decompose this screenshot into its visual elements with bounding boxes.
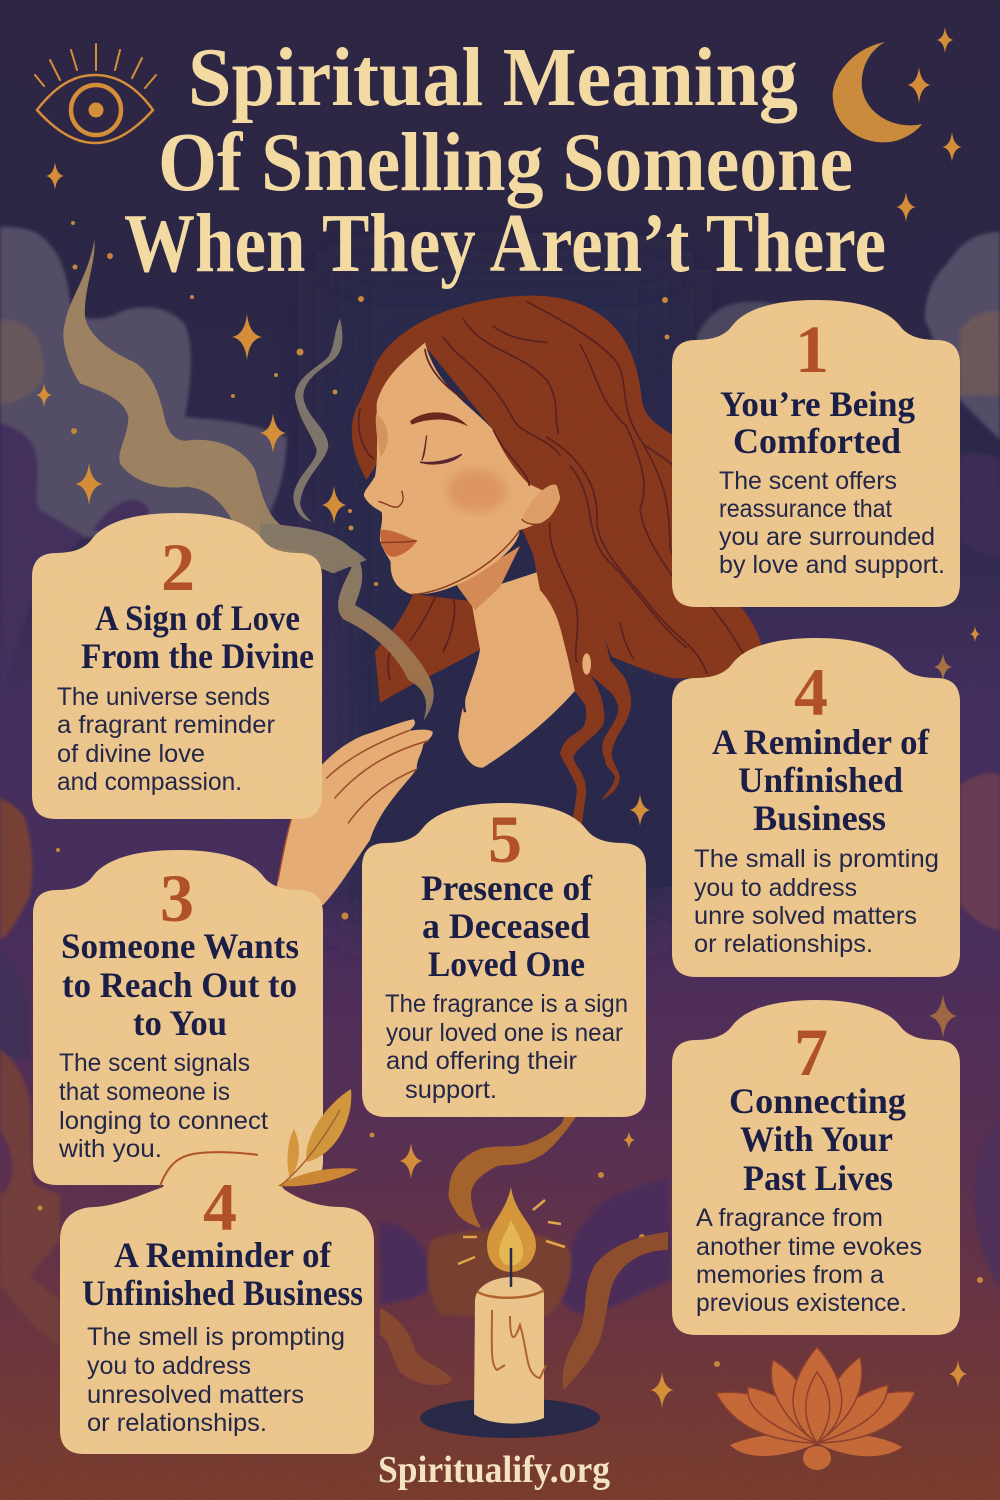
card 4 right: Unfinished (738, 760, 903, 800)
card 4 right (672, 638, 960, 977)
card 7: memories from a (696, 1261, 884, 1289)
card 5: support. (405, 1076, 497, 1104)
hair behind neck (375, 594, 480, 703)
card 2 (32, 513, 322, 819)
card 3: that someone is (59, 1078, 230, 1106)
card 3: The scent signals (59, 1049, 250, 1077)
card 2: The universe sends (57, 683, 270, 711)
dust specks (38, 221, 983, 1367)
smoke wisp: large left (63, 240, 367, 573)
hair (352, 296, 765, 826)
card 4 right: unre solved matters (694, 902, 917, 930)
lips (380, 530, 417, 557)
card 1: you are surrounded (719, 523, 935, 551)
card 4 bottom: you to address (87, 1352, 251, 1380)
smoke wisp: near nose and hand (260, 523, 434, 721)
card 3: Someone Wants (61, 926, 299, 966)
card 5: The fragrance is a sign (385, 990, 628, 1018)
card 5: Loved One (428, 944, 585, 984)
icon: leaf sprig (160, 1089, 358, 1186)
card 2: A Sign of Love (95, 598, 300, 638)
card 3: longing to connect (59, 1107, 268, 1135)
card 2: and compassion. (57, 768, 242, 796)
navy glow behind the woman (335, 270, 675, 920)
face (364, 342, 560, 594)
card 7 (672, 1000, 960, 1335)
card 7: another time evokes (696, 1233, 922, 1261)
card 5: a Deceased (422, 906, 590, 946)
card 5: your loved one is near (386, 1019, 623, 1047)
card 5 (362, 801, 646, 1117)
card 2: of divine love (57, 740, 205, 768)
card 3: with you. (58, 1135, 162, 1163)
card 4 right: A Reminder of (712, 722, 930, 762)
title (124, 31, 886, 290)
card 4 bottom: A Reminder of (114, 1235, 332, 1275)
smoke wisp: thin (293, 318, 342, 522)
collar shadow (464, 671, 473, 712)
card 7: previous existence. (696, 1289, 907, 1317)
candle plate (420, 1398, 600, 1438)
card 1: 1 (795, 311, 829, 387)
finger lines (278, 731, 428, 880)
icon: crescent moon (833, 42, 922, 142)
card 1: You’re Being (720, 384, 915, 424)
closed eye (420, 435, 462, 464)
hair strands (359, 301, 747, 680)
card 4 bottom (60, 1155, 374, 1454)
candle smoke (380, 1100, 668, 1390)
nose (378, 491, 403, 507)
icon: lotus (716, 1347, 915, 1470)
card 3: to You (133, 1003, 227, 1043)
card 1: Comforted (733, 421, 901, 461)
eyebrow (410, 412, 468, 426)
title: Of Smelling Someone (158, 116, 853, 209)
card 3 (33, 850, 323, 1185)
card 5: 5 (488, 801, 522, 877)
title: When They Aren’t There (124, 197, 886, 290)
card 7: A fragrance from (696, 1204, 883, 1232)
card 1: reassurance that (719, 495, 892, 523)
ear (522, 485, 559, 525)
card 4 bottom: unresolved matters (87, 1381, 304, 1409)
background clouds (0, 227, 1000, 1345)
card 1 (672, 300, 960, 607)
navy dress (360, 650, 677, 887)
card 4 bottom: Unfinished Business (82, 1273, 363, 1313)
card 7: Connecting (729, 1081, 906, 1121)
hand and arm (273, 719, 433, 905)
card 7: Past Lives (743, 1158, 893, 1198)
neck (458, 566, 575, 768)
card 3: to Reach Out to (62, 965, 297, 1005)
card 4 right: 4 (794, 654, 828, 730)
icon: third eye (35, 44, 156, 143)
card 4 right: or relationships. (694, 930, 873, 958)
card 4 right: you to address (694, 874, 857, 902)
card 7: With Your (740, 1119, 893, 1159)
skin gap in hair (582, 653, 591, 675)
jaw line (412, 530, 520, 594)
card 4 right: The small is promting (694, 845, 939, 873)
card 5: Presence of (421, 868, 593, 908)
card 4 bottom: or relationships. (87, 1409, 267, 1437)
card 1: by love and support. (719, 551, 945, 579)
card 2: a fragrant reminder (57, 711, 275, 739)
card 5: and offering their (386, 1047, 577, 1075)
card 1: The scent offers (719, 467, 897, 495)
neck shadow (457, 546, 520, 610)
candle body (474, 1277, 544, 1424)
footer site name: Spiritualify.org (378, 1449, 610, 1491)
flame (487, 1187, 536, 1272)
card 2: 2 (161, 529, 195, 605)
title: Spiritual Meaning (188, 31, 798, 124)
card 4 bottom: 4 (203, 1169, 237, 1245)
card 7: 7 (794, 1014, 828, 1090)
card 2: From the Divine (81, 636, 314, 676)
card 4 bottom: The smell is prompting (87, 1323, 345, 1351)
cheek blush (447, 469, 507, 512)
woman illustration (260, 296, 765, 905)
card 3: 3 (160, 860, 194, 936)
candle (420, 1187, 600, 1438)
card 4 right: Business (753, 798, 886, 838)
far-side eye socket sliver (376, 414, 388, 457)
